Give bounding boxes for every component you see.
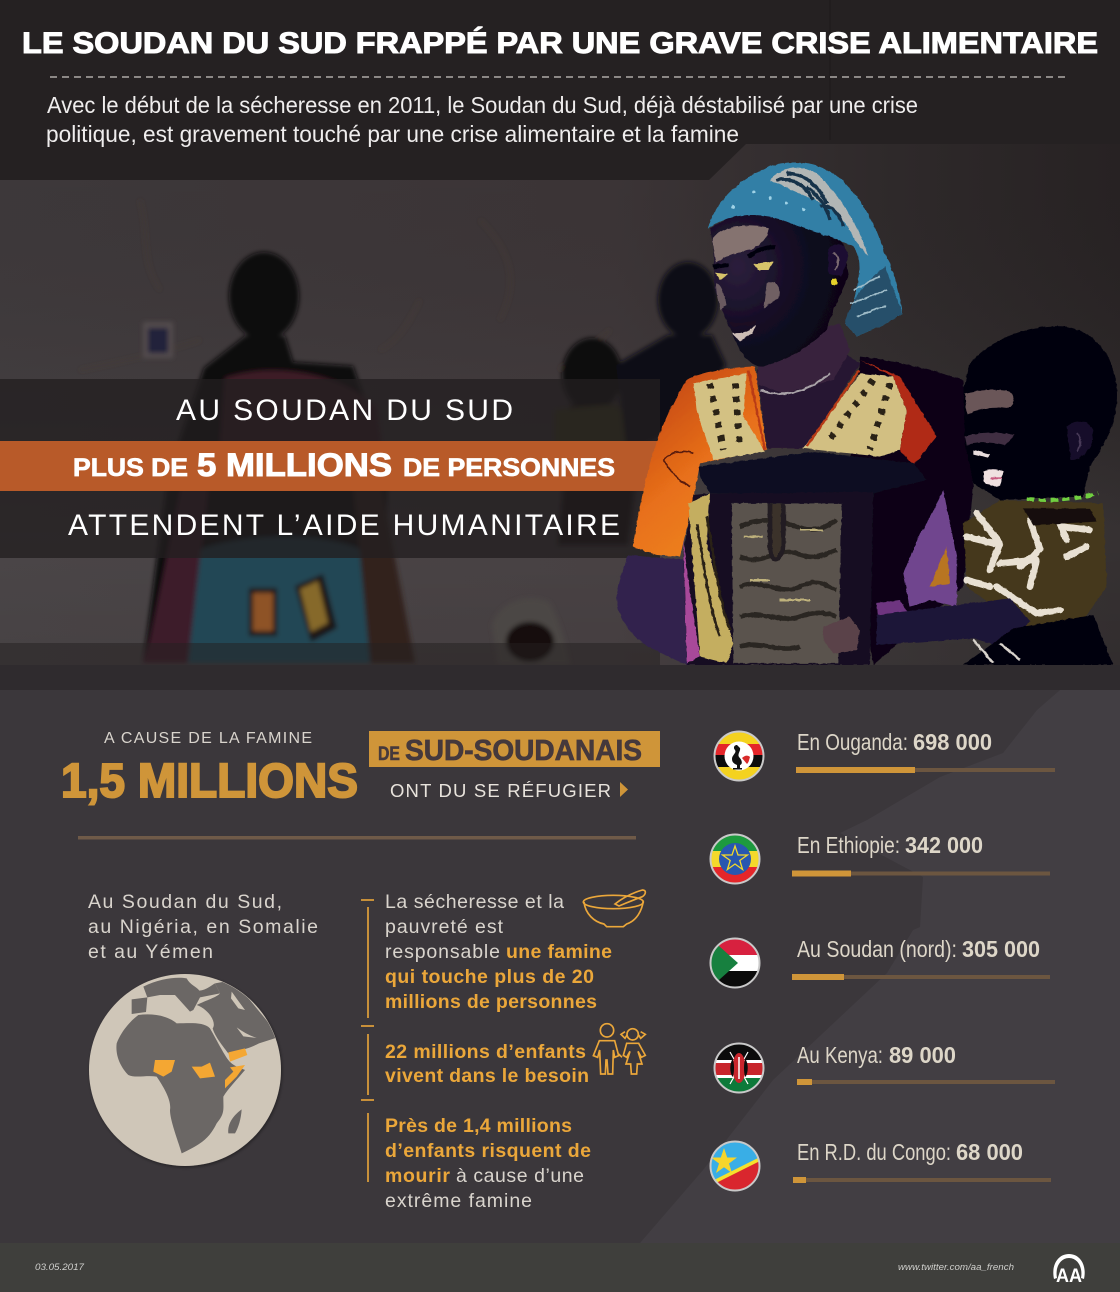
- label: Kenya 89 000: [797, 1042, 956, 1068]
- bar: Ethiopie: [792, 870, 1050, 876]
- headscarf: [708, 163, 903, 337]
- label: R.D. du Congo 68 000: 68 000: [956, 1139, 1023, 1165]
- label: Ouganda 698 000: En Ouganda:: [797, 729, 908, 755]
- panel: dark title band: [0, 0, 1120, 180]
- label: Soudan 305 000: Au Soudan (nord):: [797, 936, 957, 962]
- headline: plus de 5 millions de personnes: PLUS DE: [73, 454, 188, 482]
- bar: Soudan: [792, 974, 1050, 980]
- text: drought and poverty: qui touche plus de 20: [385, 966, 594, 988]
- text: drought and poverty: pauvreté est: [385, 916, 504, 938]
- label: Kenya 89 000: 89 000: [889, 1042, 956, 1068]
- text: drought and poverty: une famine: [506, 941, 612, 963]
- bottom strip of hero: [0, 665, 1120, 690]
- icon: two children: [593, 1024, 645, 1074]
- subtitle text: Avec le début de la sécheresse en 2011, le Soudan du Sud, déjà déstabilisé par une crise: [47, 92, 918, 118]
- arrow: [620, 782, 628, 797]
- text: children at risk: à cause d’une: [456, 1165, 584, 1187]
- date: 03.05.2017: [35, 1262, 85, 1273]
- stat: 1,5 millions: 1,5 MILLIONS: [61, 755, 358, 808]
- text: children at risk: [385, 1115, 591, 1212]
- stat: ont du se réfugier: ONT DU SE RÉFUGIER: [390, 780, 611, 801]
- headline: attendent l'aide humanitaire: ATTENDENT L’AIDE HUMANITAIRE: [68, 509, 620, 542]
- woman's arm: [617, 555, 703, 665]
- text: drought and poverty: millions de personnes: [385, 991, 597, 1013]
- background figures: [80, 200, 726, 665]
- text: children in need: 22 millions d’enfants: [385, 1041, 586, 1063]
- flag: Ethiopia: [710, 834, 760, 884]
- purple fabric: [903, 490, 957, 607]
- text: affected countries: et au Yémen: [88, 941, 213, 963]
- headline: au Soudan du Sud: AU SOUDAN DU SUD: [176, 394, 513, 427]
- text: children in need: [385, 1041, 589, 1087]
- label: Ouganda 698 000: [797, 729, 992, 755]
- illustration: mother and child: [617, 163, 1117, 665]
- text: affected countries: Au Soudan du Sud,: [88, 891, 282, 913]
- headline bands: [0, 379, 660, 665]
- bar: Ouganda: [796, 767, 1055, 773]
- crisis countries: [153, 1048, 247, 1088]
- gold label: de Sud-Soudanais: SUD-SOUDANAIS: [405, 735, 642, 767]
- neck and chest: [757, 350, 860, 448]
- row: Kenya: [714, 1042, 1055, 1093]
- headline: plus de 5 millions de personnes: 5 MILLIONS: [197, 447, 392, 483]
- face: [710, 213, 848, 367]
- headline: plus de 5 millions de personnes: [73, 447, 615, 483]
- footer: [0, 1243, 1120, 1292]
- title: LE SOUDAN DU SUD FRAPPÉ PAR UNE GRAVE CRISE ALIMENTAIRE: [22, 26, 1098, 60]
- text: children at risk: extrême famine: [385, 1190, 532, 1212]
- text: children at risk: Près de 1,4 millions: [385, 1115, 572, 1137]
- flag: Sudan: [710, 938, 760, 988]
- label: Ethiopie 342 000: 342 000: [905, 832, 983, 858]
- text: drought and poverty: [385, 891, 612, 1013]
- label: R.D. du Congo 68 000: En R.D. du Congo:: [797, 1139, 951, 1165]
- twitter url: www.twitter.com/aa_french: [898, 1262, 1014, 1273]
- text: children at risk: mourir: [385, 1165, 450, 1187]
- label: Soudan 305 000: 305 000: [962, 936, 1040, 962]
- text: children at risk: d’enfants risquent de: [385, 1140, 591, 1162]
- logo: AA: [1053, 1254, 1085, 1287]
- label: Ouganda 698 000: 698 000: [913, 729, 992, 755]
- text: children in need: vivent dans le besoin: [385, 1065, 589, 1087]
- carrier band: [699, 452, 927, 493]
- text: affected countries: [88, 891, 318, 963]
- panel: lower statistics background: [0, 690, 1120, 1243]
- icon: bowl: [583, 890, 645, 927]
- stat: a cause de la famine: A CAUSE DE LA FAMINE: [104, 730, 312, 747]
- woman dark shoulder: [847, 357, 973, 665]
- logo: AA: AA: [1056, 1266, 1082, 1287]
- child's shirt: [963, 500, 1107, 630]
- timeline rules: [361, 900, 374, 1182]
- label: Kenya 89 000: Au Kenya:: [797, 1042, 883, 1068]
- orange sleeve: [633, 367, 767, 557]
- gold label: de Sud-Soudanais: DE: [378, 744, 400, 765]
- subtitle text: politique, est gravement touché par une crise alimentaire et la famine: [46, 121, 739, 147]
- child head: [963, 326, 1117, 500]
- flag: Kenya: [714, 1043, 764, 1093]
- label: Ethiopie 342 000: [797, 832, 983, 858]
- globe map: [89, 974, 281, 1166]
- text: drought and poverty: La sécheresse et la: [385, 891, 564, 913]
- bar: Congo: [793, 1177, 1051, 1183]
- arm across: [877, 598, 1030, 648]
- flag: Uganda: [714, 731, 764, 781]
- hand: [823, 617, 860, 653]
- headline: plus de 5 millions de personnes: DE PERSONNES: [403, 454, 615, 482]
- subtitle text: [46, 92, 918, 147]
- text: affected countries: au Nigéria, en Somalie: [88, 916, 318, 938]
- carrier cloth: [683, 492, 873, 665]
- row: Ouganda: [714, 729, 1055, 781]
- bar: Kenya: [797, 1079, 1055, 1085]
- text: drought and poverty: responsable: [385, 941, 500, 963]
- row: Soudan: [710, 936, 1050, 988]
- land masses: [116, 978, 280, 1153]
- label: Ethiopie 342 000: En Ethiopie:: [797, 832, 900, 858]
- flag: DR Congo: [710, 1141, 760, 1191]
- yellow collars: [693, 360, 937, 465]
- row: R.D. du Congo: [710, 1139, 1051, 1191]
- row: Ethiopie: [710, 832, 1050, 884]
- panel: hero photo background: [0, 140, 1120, 666]
- seas: [231, 992, 257, 1038]
